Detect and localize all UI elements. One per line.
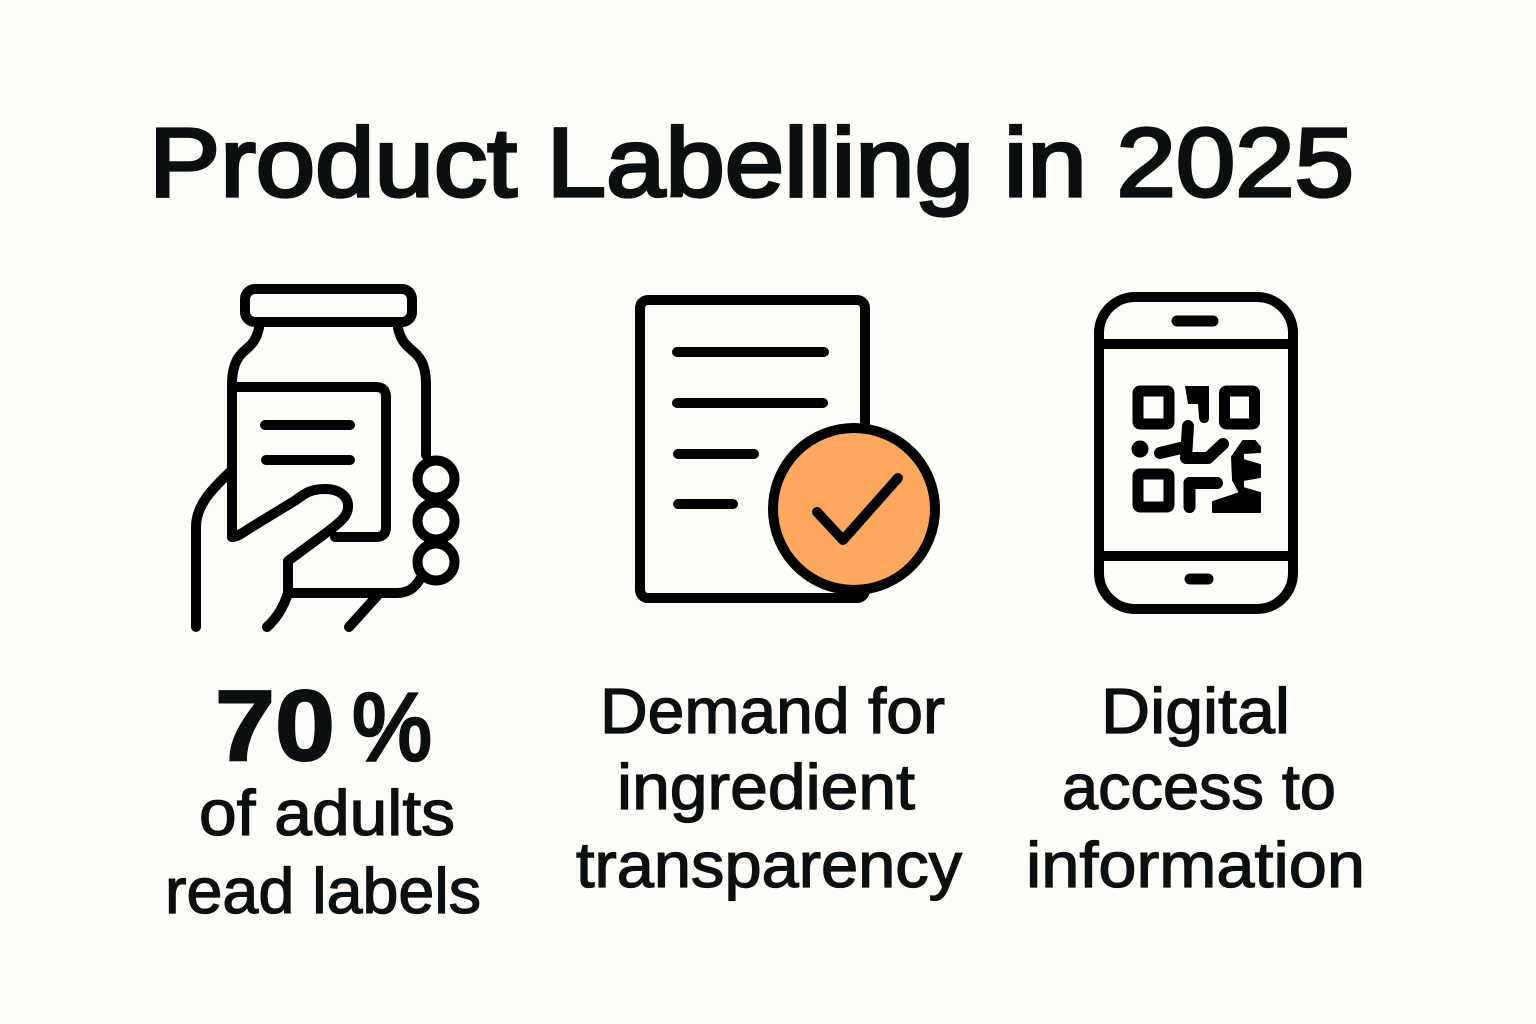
caption: demand for ingredient transparency xyxy=(576,675,962,901)
stat: 70 percent: 70 xyxy=(215,670,335,782)
caption: demand for ingredient transparency: Demand for xyxy=(600,675,945,747)
caption: digital access to information: access to xyxy=(1062,751,1336,823)
speaker and home button xyxy=(1177,321,1213,579)
caption: digital access to information: information xyxy=(1026,829,1365,901)
jar label xyxy=(232,387,386,537)
caption: digital access to information xyxy=(1026,675,1365,901)
document xyxy=(640,300,865,598)
thumb and palm xyxy=(232,489,420,593)
caption: of adults read labels: of adults xyxy=(199,777,455,849)
check mark xyxy=(817,478,898,540)
caption: digital access to information: Digital xyxy=(1101,675,1290,747)
icon: smartphone with QR code xyxy=(1099,297,1293,609)
phone body xyxy=(1099,297,1293,609)
stat: 70 percent: % xyxy=(352,674,432,781)
caption: demand for ingredient transparency: ingredient xyxy=(617,751,915,823)
fingers xyxy=(418,460,454,580)
jar body xyxy=(232,328,426,537)
icon: hand holding jar with label xyxy=(196,289,454,627)
caption: of adults read labels: read labels xyxy=(165,855,481,927)
stat: 70 percent xyxy=(215,670,432,782)
icon: document with orange check badge xyxy=(640,300,935,598)
hand outline and wrist xyxy=(196,470,377,627)
label text lines xyxy=(265,425,350,460)
check badge xyxy=(773,428,935,590)
jar lid xyxy=(245,289,412,322)
screen dividers xyxy=(1099,344,1293,556)
caption: demand for ingredient transparency: transparency xyxy=(576,829,962,901)
QR code xyxy=(1132,386,1260,512)
title: Product Labelling in 2025 xyxy=(149,108,1354,217)
caption: of adults read labels xyxy=(165,777,481,927)
document text lines xyxy=(677,352,824,504)
